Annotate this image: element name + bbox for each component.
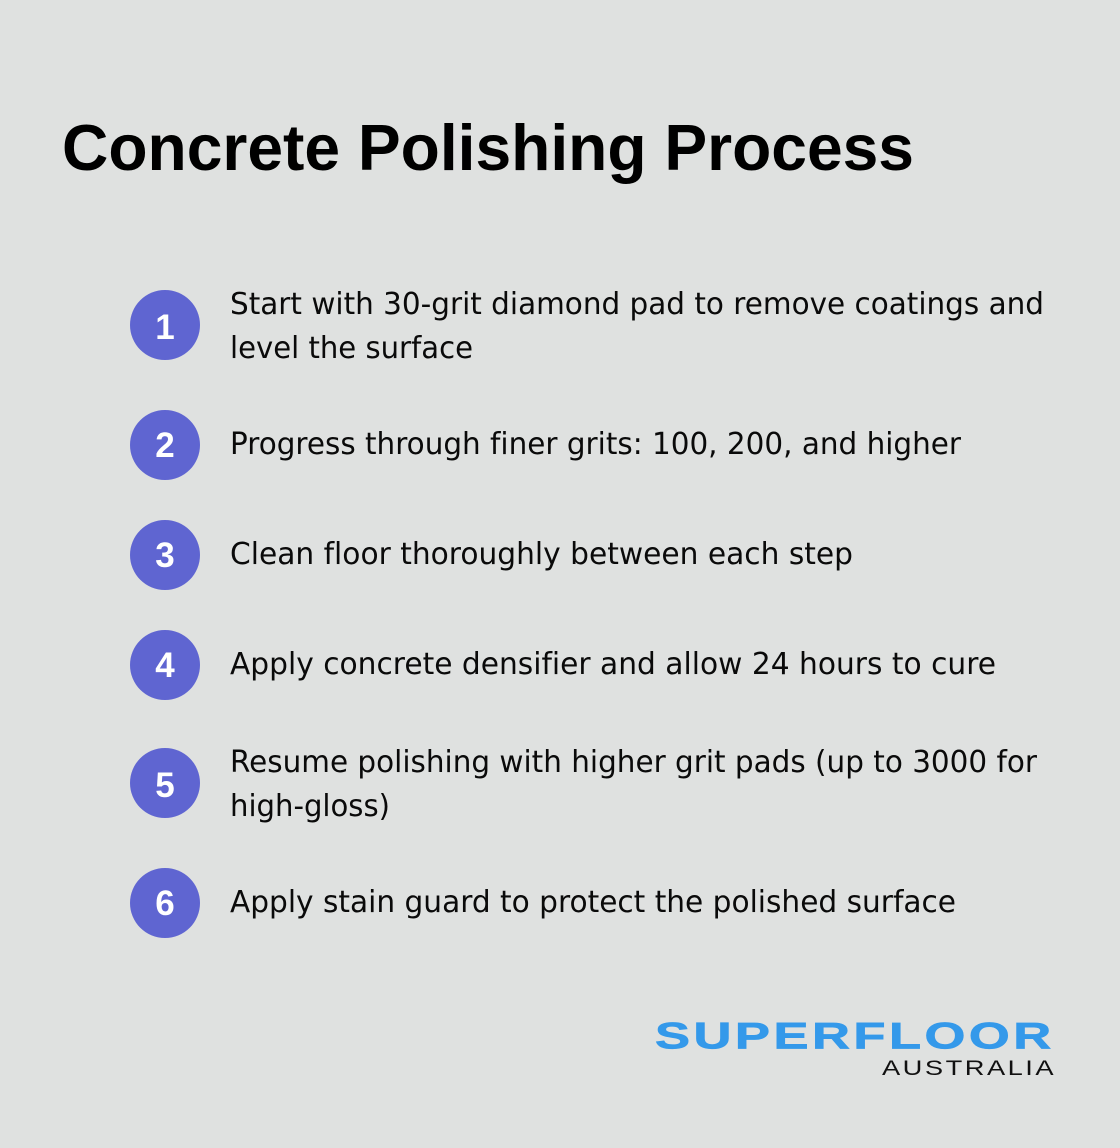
step 4 badge [130, 630, 200, 700]
step 4 badge: 4 [155, 646, 175, 685]
step 1 text: level the surface [230, 331, 473, 366]
step 2 [130, 410, 962, 480]
step 6 badge [130, 868, 200, 938]
logo wordmark: SUPERFLOOR [655, 1015, 1051, 1057]
step 5 text [230, 745, 1038, 824]
step 1 badge: 1 [155, 308, 175, 347]
step 5 badge [130, 748, 200, 818]
logo [655, 1015, 1054, 1080]
step 2 text: Progress through finer grits: 100, 200, and higher [230, 427, 962, 462]
step 1 text: Start with 30-grit diamond pad to remove coatings and [230, 287, 1044, 322]
step 5 [130, 745, 1038, 824]
step 1 text [230, 287, 1044, 366]
step 6 text: Apply stain guard to protect the polished surface [230, 885, 956, 920]
step 3 badge [130, 520, 200, 590]
logo subtitle: AUSTRALIA [882, 1057, 1054, 1080]
step 1 badge [130, 290, 200, 360]
step 3 text: Clean floor thoroughly between each step [230, 537, 853, 572]
step 6 [130, 868, 956, 938]
step 5 text: Resume polishing with higher grit pads (up to 3000 for [230, 745, 1038, 780]
step 1 [130, 287, 1044, 366]
step 5 text: high-gloss) [230, 789, 390, 824]
step 3 badge: 3 [155, 536, 175, 575]
step 4 [130, 630, 996, 700]
step 3 [130, 520, 853, 590]
step 5 badge: 5 [155, 766, 175, 805]
step 2 badge [130, 410, 200, 480]
step 6 badge: 6 [155, 884, 175, 923]
step 4 text: Apply concrete densifier and allow 24 hours to cure [230, 647, 996, 682]
step 2 badge: 2 [155, 426, 175, 465]
title: Concrete Polishing Process [62, 111, 914, 184]
